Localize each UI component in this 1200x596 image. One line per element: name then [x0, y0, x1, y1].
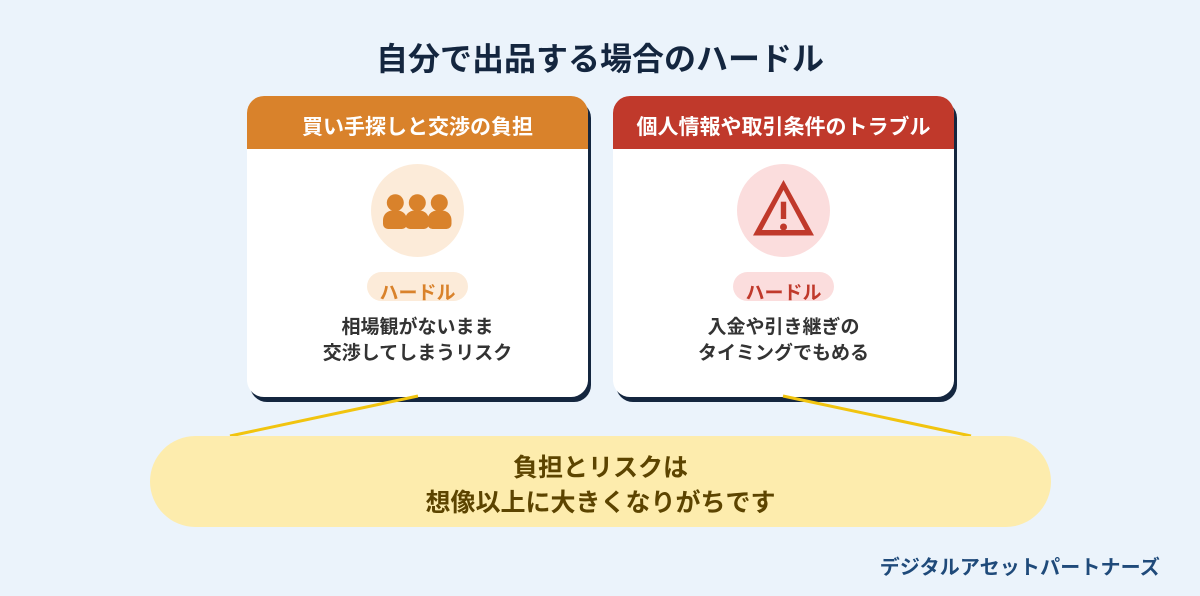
hurdle description: 相場観がないまま	[341, 317, 494, 338]
callout: 負担とリスクは	[513, 454, 688, 482]
panel: personal information and terms trouble	[613, 96, 957, 402]
panel heading	[247, 96, 588, 149]
icon: warning triangle	[737, 164, 830, 257]
hurdle description: 入金や引き継ぎの	[707, 317, 860, 338]
panel heading: 買い手探しと交渉の負担	[302, 116, 533, 139]
hurdle badge	[733, 272, 834, 301]
hurdle description: タイミングでもめる	[698, 343, 869, 364]
panel heading	[613, 96, 954, 149]
hurdle description: 交渉してしまうリスク	[323, 343, 512, 364]
hurdle description	[323, 316, 512, 364]
hurdle badge	[367, 272, 468, 301]
panel heading: 個人情報や取引条件のトラブル	[636, 116, 930, 139]
panel: buyer search and negotiation	[247, 96, 591, 402]
title: 自分で出品する場合のハードル	[376, 41, 824, 77]
hurdle description	[698, 316, 869, 364]
brand name: デジタルアセットパートナーズ	[880, 557, 1160, 579]
callout	[150, 436, 1051, 527]
callout: 想像以上に大きくなりがちです	[425, 489, 776, 517]
icon: people	[371, 164, 464, 257]
